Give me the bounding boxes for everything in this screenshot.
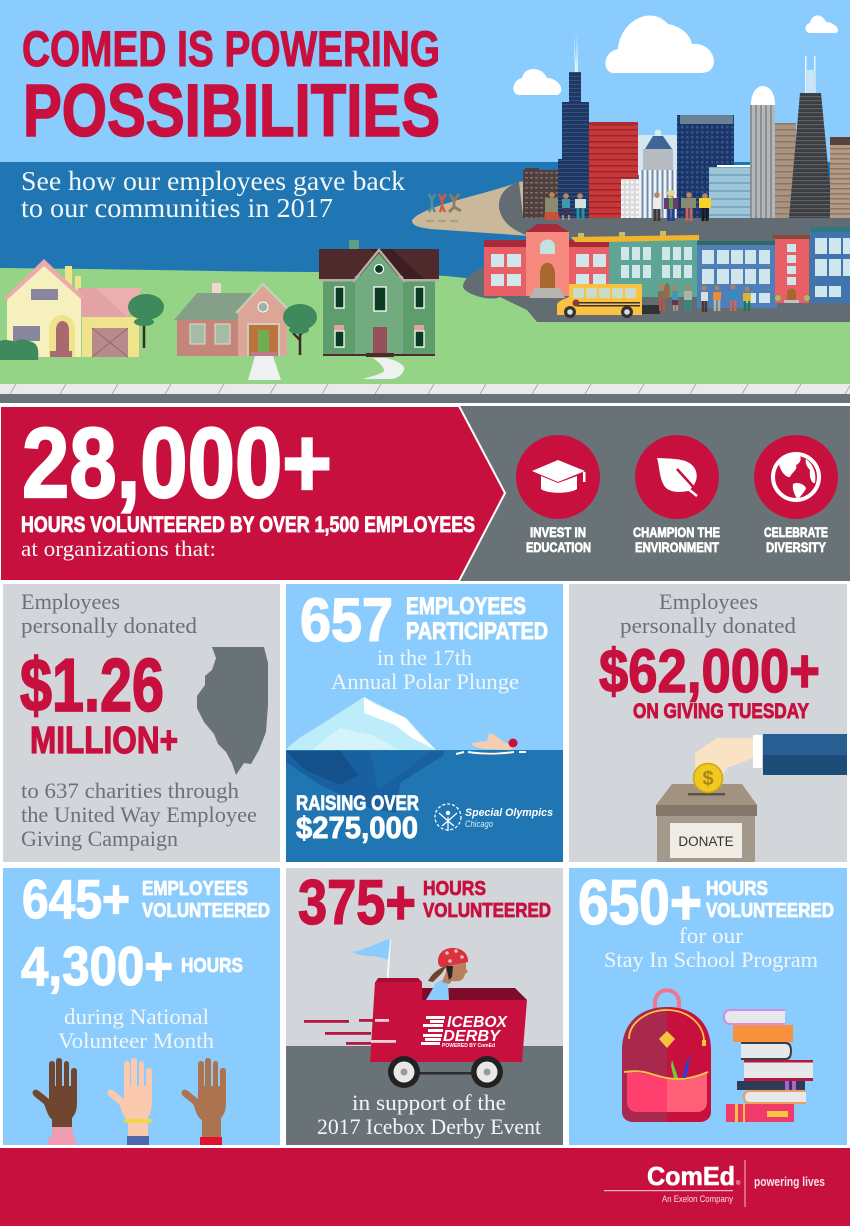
tree xyxy=(128,294,164,348)
neighborhood land xyxy=(463,232,850,322)
label: champion the environment: CHAMPION THE xyxy=(633,524,720,540)
description: 2017 Icebox Derby Event xyxy=(317,1114,541,1139)
illustration: donation box xyxy=(656,784,757,862)
closing text xyxy=(21,778,257,851)
illustration: soapbox car xyxy=(370,978,527,1088)
panel: National Volunteer Month xyxy=(3,868,280,1145)
clouds xyxy=(513,15,838,95)
description: Annual Polar Plunge xyxy=(331,669,519,694)
tree xyxy=(283,304,317,355)
intro text: Employees xyxy=(21,589,120,614)
ComEd logo: ® xyxy=(736,1180,741,1187)
label: invest in education xyxy=(526,524,591,555)
speed lines xyxy=(304,1019,396,1045)
group of schoolchildren xyxy=(658,283,751,312)
heading: hours volunteered xyxy=(423,878,551,922)
subtitle xyxy=(21,166,406,223)
intro text: Employees xyxy=(659,589,758,614)
illustration: gold coin: $ xyxy=(702,768,714,790)
label: celebrate diversity: DIVERSITY xyxy=(766,539,827,555)
title line 2: POSSIBILITIES xyxy=(23,69,440,152)
closing text: the United Way Employee xyxy=(21,802,257,827)
figure 645+: 645+ xyxy=(22,868,130,930)
school bus xyxy=(557,284,660,318)
heading: hours volunteered: VOLUNTEERED xyxy=(423,900,551,922)
intro text: personally donated xyxy=(620,613,796,638)
label: celebrate diversity xyxy=(764,524,828,555)
figure $62,000+: $62,000+ xyxy=(599,637,820,705)
icon: leaf xyxy=(635,435,719,519)
intro text: personally donated xyxy=(21,613,197,638)
banner subline: at organizations that: xyxy=(21,536,216,561)
panel: Giving Tuesday xyxy=(569,584,847,862)
banner headline: HOURS VOLUNTEERED BY OVER 1,500 EMPLOYEES xyxy=(21,512,475,537)
heading: on giving tuesday: ON GIVING TUESDAY xyxy=(633,700,809,723)
intro text xyxy=(620,589,796,638)
logo divider xyxy=(744,1160,746,1207)
Icebox Derby logo: POWERED BY ComEd xyxy=(442,1043,495,1049)
description xyxy=(331,645,519,694)
sidewalk and road xyxy=(0,384,850,403)
label: invest in education: INVEST IN xyxy=(530,524,586,540)
Icebox Derby logo: DERBY xyxy=(443,1028,501,1045)
illustration: backpack xyxy=(622,990,711,1122)
description: during National xyxy=(64,1004,209,1029)
heading: hours volunteered: HOURS xyxy=(423,878,486,900)
Special Olympics Chicago logo: Special Olympics xyxy=(465,807,553,819)
figure 4,300+: 4,300+ xyxy=(21,935,173,997)
people on downtown street xyxy=(544,190,711,221)
heading: hours volunteered xyxy=(706,878,834,922)
description: in the 17th xyxy=(377,645,472,670)
green house xyxy=(319,240,439,357)
description xyxy=(604,923,818,972)
title xyxy=(22,21,440,152)
Icebox Derby logo xyxy=(421,1014,508,1049)
description xyxy=(317,1090,541,1139)
tagline: powering lives xyxy=(754,1174,825,1189)
panel: Polar Plunge xyxy=(286,584,563,862)
heading: employees participated xyxy=(406,593,548,645)
title line 1: COMED IS POWERING xyxy=(22,21,440,77)
yellow house xyxy=(3,259,142,357)
amount raised xyxy=(296,792,419,845)
closing text: Giving Campaign xyxy=(21,826,178,851)
closing text: to 637 charities through xyxy=(21,778,239,803)
illustration: donation box: DONATE xyxy=(678,834,734,849)
hero illustration panel xyxy=(0,0,850,403)
figure $1.26: $1.26 xyxy=(20,643,164,727)
Icebox Derby logo: ICEBOX xyxy=(447,1014,508,1031)
panel: United Way donations xyxy=(3,584,280,862)
swimmer xyxy=(456,733,526,754)
subtitle: to our communities in 2017 xyxy=(21,193,333,223)
illustration: dark hand xyxy=(32,1058,77,1145)
heading: employees volunteered: VOLUNTEERED xyxy=(142,900,270,922)
icon: graduation cap xyxy=(516,435,600,519)
banner: hours volunteered xyxy=(0,406,850,581)
brown house xyxy=(174,283,289,356)
label: invest in education: EDUCATION xyxy=(526,539,591,555)
heading: employees participated: EMPLOYEES xyxy=(406,593,526,620)
intro text xyxy=(21,589,197,638)
icon: globe xyxy=(754,435,838,519)
heading: hours: HOURS xyxy=(181,955,243,977)
footer xyxy=(0,1148,850,1226)
ComEd logo: ComEd xyxy=(647,1161,735,1191)
description: in support of the xyxy=(352,1090,506,1115)
illustration: driver girl xyxy=(426,948,468,1000)
front walkways xyxy=(248,356,404,380)
illustration: flag xyxy=(352,939,391,982)
icon: Illinois map xyxy=(197,647,268,775)
Special Olympics Chicago logo xyxy=(435,804,553,831)
heading: employees volunteered: EMPLOYEES xyxy=(142,878,248,900)
heading: employees participated: PARTICIPATED xyxy=(406,618,548,645)
heading: hours volunteered: HOURS xyxy=(706,878,768,900)
label: celebrate diversity: CELEBRATE xyxy=(764,524,828,540)
iceberg xyxy=(286,697,444,813)
amount raised: RAISING OVER xyxy=(296,792,419,815)
subtitle: See how our employees gave back xyxy=(21,166,406,196)
panel: Stay In School xyxy=(569,868,847,1145)
big number 28,000+: 28,000+ xyxy=(22,407,332,518)
Special Olympics Chicago logo: Chicago xyxy=(465,819,493,830)
red school building xyxy=(484,224,609,298)
description: Stay In School Program xyxy=(604,947,818,972)
bush xyxy=(0,339,38,360)
label: champion the environment xyxy=(633,524,720,555)
figure million+: MILLION+ xyxy=(30,720,178,762)
Chicago skyline xyxy=(523,33,850,218)
illustration: stack of books xyxy=(723,1009,813,1122)
label: champion the environment: ENVIRONMENT xyxy=(635,539,719,555)
description: Volunteer Month xyxy=(58,1028,214,1053)
ComEd logo xyxy=(604,1161,741,1205)
row of city buildings xyxy=(571,227,850,308)
beach with jumping people xyxy=(412,180,530,236)
downtown land xyxy=(499,182,850,240)
figure 657: 657 xyxy=(300,586,393,654)
figure 650+: 650+ xyxy=(578,868,702,938)
illustration: medium hand xyxy=(182,1058,226,1145)
figure 375+: 375+ xyxy=(298,868,416,938)
heading: employees volunteered xyxy=(142,878,270,922)
description xyxy=(58,1004,214,1053)
panel: Icebox Derby xyxy=(286,868,563,1145)
illustration: light hand xyxy=(108,1058,152,1145)
ComEd logo: An Exelon Company xyxy=(662,1194,733,1205)
amount raised: $275,000 xyxy=(296,810,418,845)
description: for our xyxy=(679,923,744,948)
illustration: hand and sleeve xyxy=(695,734,847,780)
illustration: gold coin xyxy=(694,764,722,792)
